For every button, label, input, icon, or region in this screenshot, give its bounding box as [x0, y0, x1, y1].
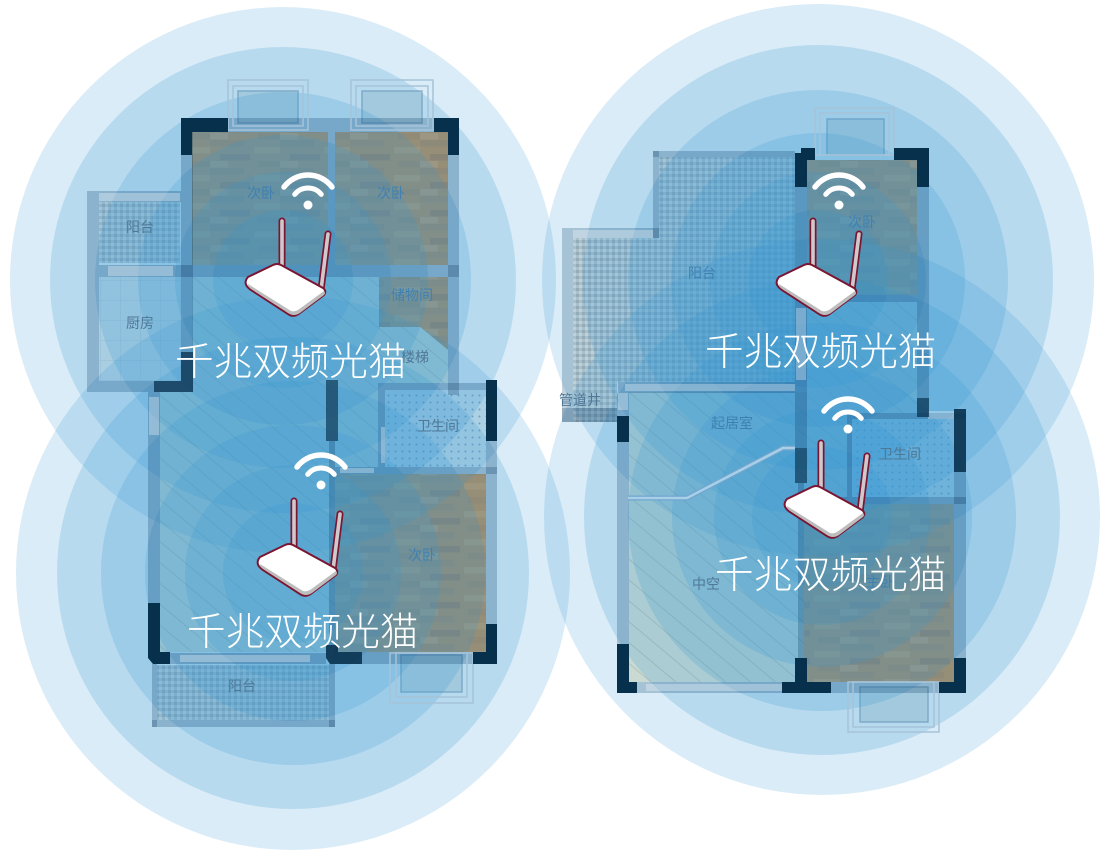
caption: top left: 千兆双频光猫	[175, 341, 406, 384]
room labels: 阳台	[228, 678, 256, 694]
stair rail	[628, 448, 795, 498]
right house living room	[629, 302, 917, 682]
room labels	[126, 185, 921, 694]
room labels: 次卧	[408, 547, 436, 563]
room labels: 楼梯	[401, 349, 429, 365]
wall openings: window strips	[99, 193, 385, 662]
floor plan: dark wall corners left house	[148, 118, 497, 664]
icon: wifi	[284, 175, 332, 210]
room labels: 厨房	[126, 315, 154, 331]
router and wifi: bottom left	[258, 455, 345, 596]
left house living room floor	[160, 277, 448, 652]
icon: router	[258, 501, 340, 596]
right house terrace	[573, 157, 795, 422]
room labels: 阳台	[126, 219, 154, 235]
wifi signal coverage: top left	[10, 7, 556, 553]
outdoor unit platforms	[238, 91, 928, 722]
icon: wifi	[815, 175, 863, 210]
room labels: 起居室	[711, 415, 753, 431]
router and wifi: top left	[246, 175, 332, 316]
icon: wifi	[824, 399, 872, 434]
icon: router	[246, 221, 328, 316]
room labels: 次卧	[848, 214, 876, 230]
left house bedroom floors	[192, 132, 486, 652]
caption: top right: 千兆双频光猫	[705, 331, 936, 374]
icon: router	[777, 221, 859, 316]
room labels: 主卧	[866, 574, 894, 590]
right house bathroom	[852, 419, 954, 497]
caption: bottom right: 千兆双频光猫	[715, 554, 946, 597]
room labels: 次卧	[377, 185, 405, 201]
wifi signal coverage: top right	[542, 4, 1094, 556]
left house balconies and wet rooms	[99, 202, 486, 720]
room labels: 卫生间	[879, 446, 921, 462]
floor plan: walls left house	[87, 80, 497, 727]
floor plan: dark wall corners right house	[617, 148, 966, 693]
router and wifi: bottom right	[785, 399, 872, 538]
floor plan: walls right house	[562, 108, 966, 732]
window strips	[573, 230, 954, 691]
room labels: 中空	[692, 576, 720, 592]
wifi signal coverage: bottom left	[16, 296, 570, 850]
room labels: 卫生间	[417, 418, 459, 434]
top and bottom unit outlines	[228, 80, 473, 703]
icon: router	[785, 443, 867, 538]
router and wifi: top right	[777, 175, 863, 316]
floor plan: room floors	[99, 91, 954, 722]
top and bottom unit outlines	[815, 108, 939, 732]
wifi signal coverage: bottom right	[544, 239, 1100, 795]
icon: wifi	[297, 455, 345, 490]
room labels: 储物间	[391, 287, 433, 303]
right house bedrooms	[804, 160, 954, 682]
caption: bottom left: 千兆双频光猫	[187, 611, 418, 654]
room labels: 管道井	[559, 392, 601, 408]
room labels: 阳台	[688, 265, 716, 281]
room labels: 次卧	[247, 185, 275, 201]
